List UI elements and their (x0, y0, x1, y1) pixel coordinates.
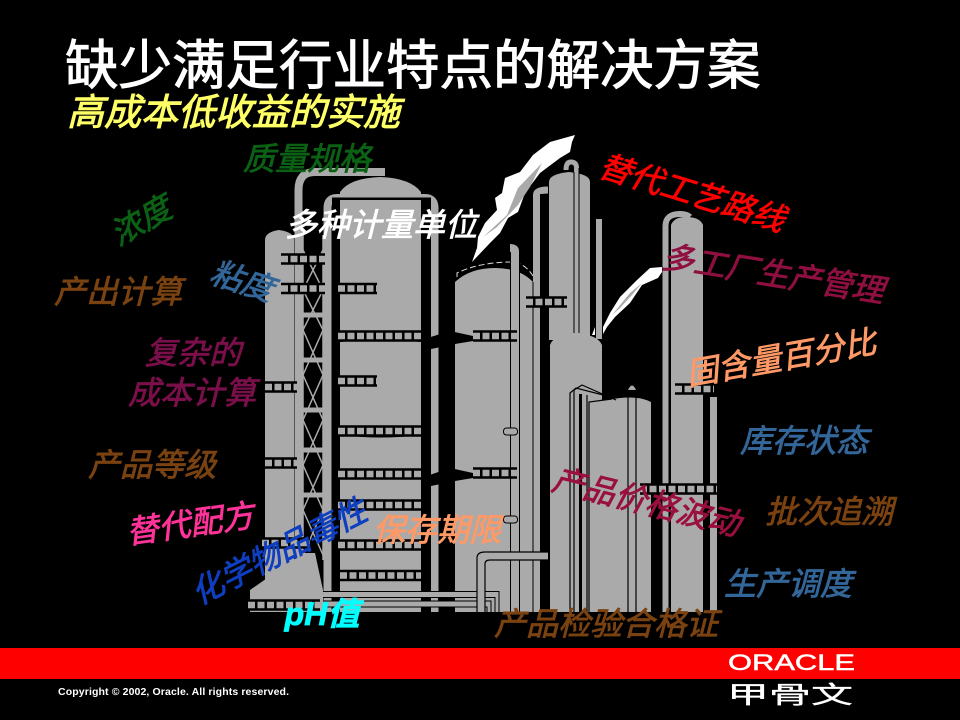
logo: Chinese name: 甲骨文 (727, 682, 853, 709)
logo: Oracle: ORACLE (728, 650, 855, 675)
label: inventory status: 库存状态 (740, 423, 872, 459)
tall thin column (549, 172, 590, 340)
refinery illustration (248, 135, 717, 612)
label: price fluctuation: 产品价格波动 (548, 461, 747, 544)
label: production scheduling: 生产调度 (724, 566, 857, 602)
label: complex costing: 复杂的 (145, 335, 245, 371)
label: multi-plant management: 多工厂生产管理 (660, 239, 890, 310)
second tank (455, 268, 533, 612)
small smoke plume (603, 267, 662, 334)
labels (54, 141, 897, 642)
label: complex costing (128, 335, 261, 411)
second tank pipes (510, 190, 548, 612)
platforms (248, 259, 717, 605)
large smoke plume (472, 135, 575, 262)
lattice tower base (250, 553, 323, 612)
copyright: Copyright © 2002, Oracle. All rights reserved. (58, 686, 289, 698)
label: pH value: pH值 (284, 596, 364, 632)
pipe nubs (504, 428, 518, 523)
label: shelf life: 保存期限 (373, 512, 504, 548)
red footer band (0, 648, 960, 679)
subtitle: 高成本低收益的实施 (67, 92, 405, 133)
tall outer pipe (298, 172, 385, 605)
label: concentration: 浓度 (104, 187, 182, 253)
right tank (590, 398, 651, 612)
label: batch tracing: 批次追溯 (765, 494, 897, 530)
right column (671, 217, 703, 612)
bottom pipework (323, 552, 548, 612)
title: 缺少满足行业特点的解决方案 (65, 37, 760, 96)
label: product certificate: 产品检验合格证 (494, 606, 723, 642)
label: solids percentage: 固含量百分比 (683, 323, 882, 392)
left column (265, 230, 294, 600)
label: viscosity: 粘度 (206, 254, 283, 310)
label: quality spec: 质量规格 (243, 141, 374, 177)
right tank pipes (570, 384, 636, 612)
label: product grade: 产品等级 (88, 447, 218, 483)
second tank dome rail (457, 262, 533, 277)
main tower (340, 177, 421, 612)
label: alternative routes: 替代工艺路线 (595, 148, 792, 239)
main tower pipe loop (328, 198, 434, 612)
label: output calculation: 产出计算 (54, 274, 187, 310)
label: complex costing: 成本计算 (128, 375, 261, 411)
short tank (550, 333, 602, 612)
lattice tower (303, 235, 323, 560)
label: multiple units: 多种计量单位 (285, 207, 480, 243)
label: chemical toxicity: 化学物品毒性 (185, 491, 375, 612)
label: alternative formula: 替代配方 (124, 497, 260, 551)
platform walkways (340, 331, 473, 486)
